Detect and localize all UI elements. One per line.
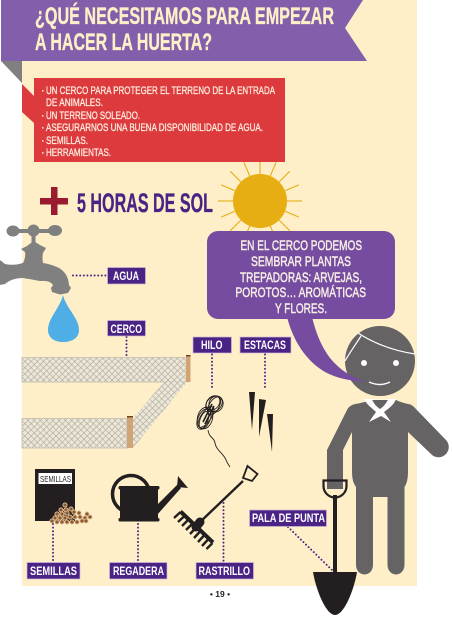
- icon: shovel: [313, 480, 357, 615]
- label: cerco: [108, 320, 146, 356]
- icon: rake: [174, 466, 258, 549]
- illustration: person: [327, 326, 449, 574]
- icon: water drop: [48, 295, 79, 342]
- label: estacas: [240, 337, 291, 390]
- icon: stakes: [249, 392, 273, 452]
- text block: callout text: Y FLORES.: [275, 301, 327, 316]
- label: cerco: CERCO: [110, 322, 142, 336]
- text block: requirements: ·: [41, 135, 45, 147]
- icon: seeds: [50, 503, 92, 524]
- label: hilo: HILO: [201, 338, 222, 352]
- text block: requirements: ·: [41, 85, 45, 97]
- smile: [369, 382, 390, 384]
- icon: sun: [218, 159, 302, 240]
- title: A HACER LA HUERTA?: [35, 29, 212, 56]
- text block: requirements: ASEGURARNOS UNA BUENA DISPONIBILIDAD DE AGUA.: [46, 122, 263, 134]
- icon: watering can: [112, 476, 188, 522]
- body: [327, 400, 449, 574]
- illustration: fence: [22, 355, 190, 448]
- text block: requirements: ·: [41, 147, 45, 159]
- label: semillas: [27, 524, 80, 579]
- callout: speech bubble: [207, 231, 395, 382]
- icon: plus sign: [40, 187, 68, 215]
- text block: requirements: UN CERCO PARA PROTEGER EL TERRENO DE LA ENTRADA: [46, 85, 275, 97]
- label: pala de punta: [250, 510, 333, 571]
- text block: requirements: ·: [41, 122, 45, 134]
- text block: requirements: DE ANIMALES.: [46, 97, 103, 109]
- hair lines: [345, 333, 415, 361]
- neckerchief: [364, 399, 396, 422]
- page number: • 19 •: [210, 589, 230, 599]
- text block: requirements: [41, 85, 275, 159]
- label: regadera: REGADERA: [113, 564, 164, 578]
- text block: callout text: TREPADORAS: ARVEJAS,: [240, 270, 362, 285]
- eyes: [361, 360, 399, 366]
- text block: callout text: SEMBRAR PLANTAS: [251, 254, 351, 269]
- label: hilo: [193, 337, 232, 390]
- label: estacas: ESTACAS: [244, 338, 286, 352]
- icon: seed bag: [35, 469, 75, 521]
- label: rastrillo: RASTRILLO: [198, 564, 250, 578]
- label: regadera: [110, 524, 167, 579]
- label: agua: AGUA: [113, 269, 139, 283]
- label: semillas: SEMILLAS: [30, 564, 77, 578]
- head: [345, 326, 415, 396]
- icon: faucet: [0, 224, 71, 294]
- text block: requirements: HERRAMIENTAS.: [46, 147, 111, 159]
- text block: callout text: EN EL CERCO PODEMOS: [240, 238, 362, 253]
- text block: requirements: UN TERRENO SOLEADO.: [46, 110, 140, 122]
- icon: coil of wire: [194, 393, 230, 467]
- text block: callout text: POROTOS… AROMÁTICAS: [236, 285, 366, 300]
- heading: 5 horas de sol: 5 HORAS DE SOL: [77, 188, 213, 218]
- title: [35, 2, 334, 56]
- text block: requirements: SEMILLAS.: [46, 135, 88, 147]
- text block: callout text: [236, 238, 366, 316]
- label: agua: [73, 268, 146, 284]
- banner: title ribbon: [1, 0, 367, 83]
- icon: seed bag: SEMILLAS: [40, 474, 71, 484]
- panel: red requirements list: [22, 78, 285, 162]
- label: rastrillo: [196, 503, 254, 579]
- label: pala de punta: PALA DE PUNTA: [252, 511, 325, 525]
- text block: requirements: ·: [41, 110, 45, 122]
